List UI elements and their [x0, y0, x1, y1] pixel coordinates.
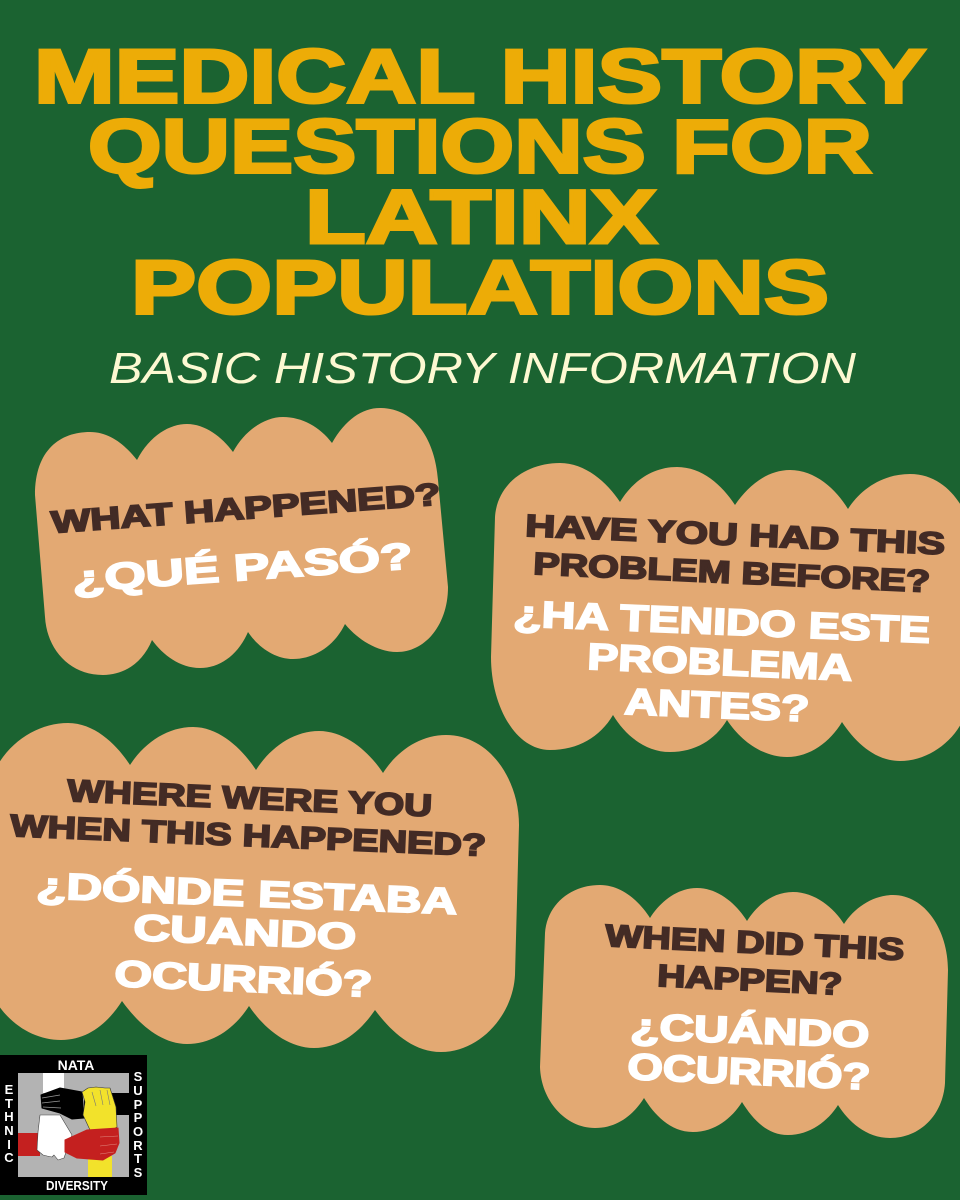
icon: white hand: [37, 1115, 72, 1160]
panel: had this problem before: [491, 463, 960, 761]
label: SUPPORTS: T: [134, 1151, 142, 1166]
english question: WHERE WERE YOU: [67, 773, 433, 823]
spanish question: OCURRIÓ?: [114, 952, 373, 1005]
spanish question: [627, 1006, 871, 1098]
label: SUPPORTS: P: [134, 1097, 143, 1112]
spanish question: OCURRIÓ?: [627, 1045, 871, 1098]
english question: HAVE YOU HAD THIS: [525, 508, 946, 561]
label: ETHNIC: H: [4, 1109, 14, 1124]
spanish question: [513, 593, 931, 729]
english question: HAPPEN?: [657, 958, 843, 1002]
icon: white arm top: [43, 1073, 64, 1093]
icon: black hand finger lines: [42, 1095, 61, 1108]
label: SUPPORTS: [133, 1069, 143, 1180]
panel: what happened: [35, 408, 448, 675]
label: DIVERSITY: DIVERSITY: [46, 1179, 109, 1193]
english question: [525, 508, 946, 599]
title: MEDICAL HISTORY: [34, 34, 926, 120]
english question: [605, 918, 905, 1002]
icon: red arm left: [18, 1133, 40, 1156]
spanish question: [36, 864, 458, 1005]
english question: WHEN DID THIS: [605, 918, 905, 967]
english question: PROBLEM BEFORE?: [533, 546, 931, 599]
icon: black arm right: [84, 1093, 129, 1115]
spanish question: CUANDO: [133, 907, 357, 957]
spanish question: ANTES?: [624, 681, 810, 729]
label: SUPPORTS: P: [134, 1110, 143, 1125]
icon: red hand: [65, 1128, 119, 1160]
label: ETHNIC: N: [4, 1123, 14, 1138]
blob: what happened background: [35, 408, 448, 675]
subtitle: BASIC HISTORY INFORMATION: [109, 344, 856, 393]
label: SUPPORTS: S: [134, 1165, 143, 1180]
label: SUPPORTS: O: [133, 1124, 143, 1139]
blob: when did this happen background: [540, 885, 948, 1138]
english question: WHEN THIS HAPPENED?: [10, 808, 487, 863]
label: ETHNIC: T: [5, 1096, 13, 1111]
spanish question: PROBLEMA: [587, 636, 853, 689]
icon: yellow arm bottom: [88, 1156, 112, 1177]
icon: yellow hand: [82, 1087, 117, 1130]
english question: WHAT HAPPENED?: [50, 477, 441, 540]
spanish question: ¿HA TENIDO ESTE: [513, 593, 931, 651]
panel: where were you: [0, 723, 519, 1052]
label: SUPPORTS: S: [134, 1069, 143, 1084]
english question: [10, 773, 487, 863]
spanish question: ¿CUÁNDO: [630, 1006, 870, 1055]
blob: problem before background: [491, 463, 960, 761]
spanish question: ¿DÓNDE ESTABA: [36, 864, 458, 922]
label: ETHNIC: I: [7, 1137, 11, 1152]
label: NATA: NATA: [58, 1057, 94, 1073]
blob: where were you background: [0, 723, 519, 1052]
title: POPULATIONS: [131, 246, 829, 330]
title: LATINX: [305, 175, 657, 260]
icon: black hand: [41, 1088, 84, 1119]
label: SUPPORTS: R: [133, 1138, 143, 1153]
panel: when did this happen: [540, 885, 948, 1138]
icon: yellow hand finger lines: [92, 1090, 110, 1106]
title: QUESTIONS FOR: [88, 104, 872, 190]
spanish question: ¿QUÉ PASÓ?: [71, 534, 414, 600]
label: ETHNIC: [4, 1082, 14, 1165]
label: ETHNIC: E: [5, 1082, 14, 1097]
logo: NATA ethnic diversity: [0, 1055, 147, 1195]
label: ETHNIC: C: [4, 1150, 14, 1165]
title: [34, 34, 926, 330]
icon: red hand finger lines: [100, 1136, 118, 1154]
label: SUPPORTS: U: [133, 1083, 143, 1098]
